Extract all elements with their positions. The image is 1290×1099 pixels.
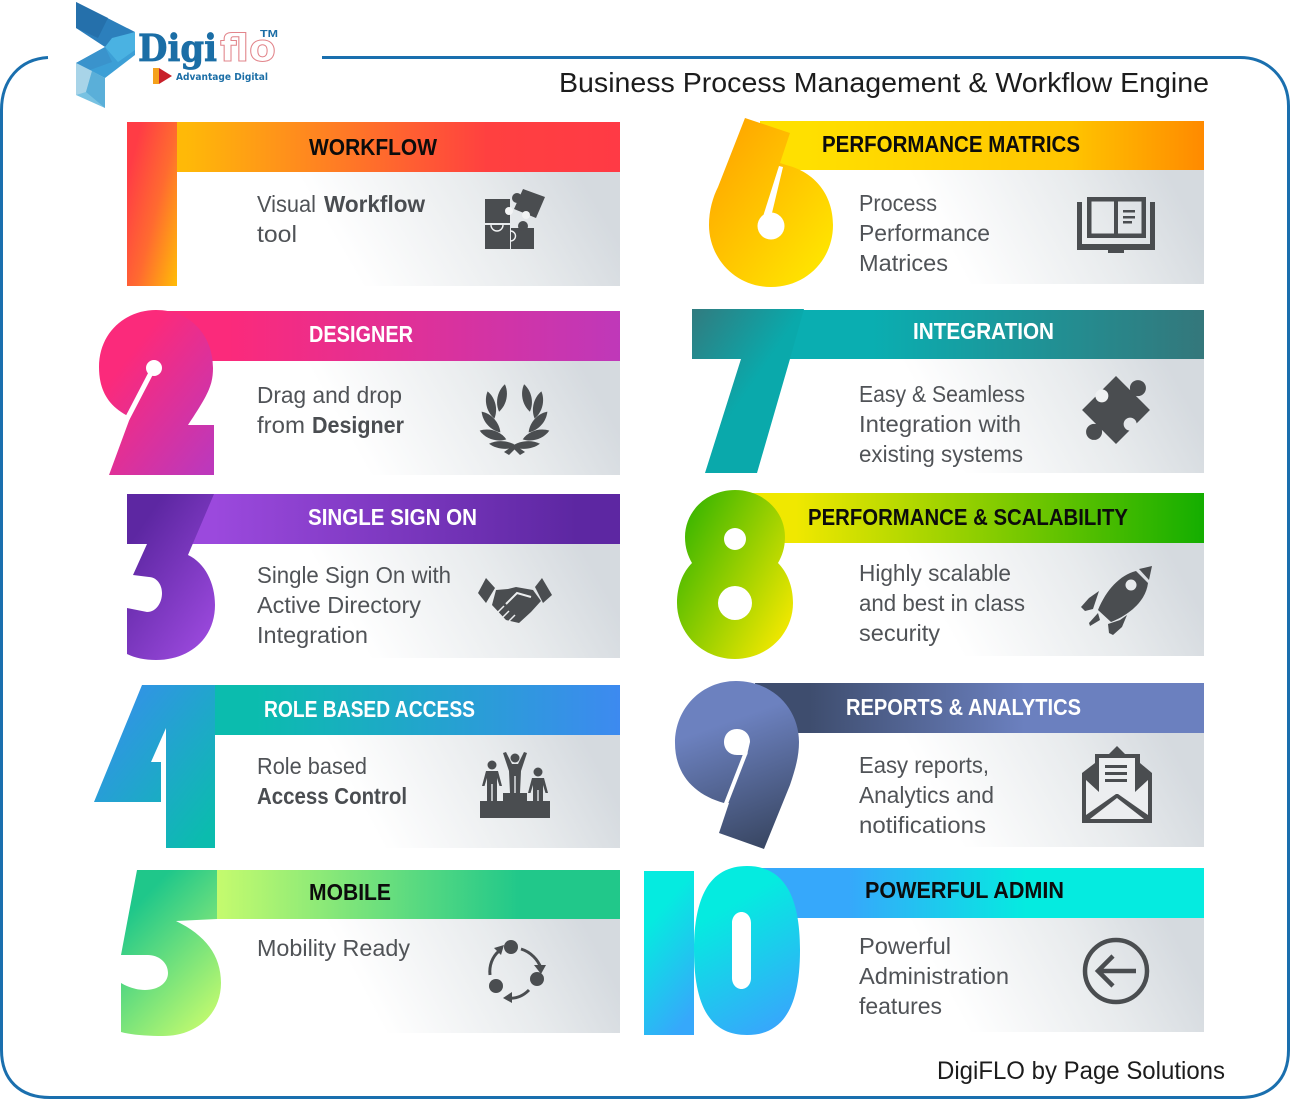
logo tagline: Advantage Digital [176, 72, 268, 83]
logo wordmark: Digi [138, 26, 217, 70]
numeral 2 [99, 310, 214, 475]
description: from [257, 412, 305, 438]
logo play icon [153, 68, 172, 84]
description [257, 562, 451, 648]
panel: 8 performance and scalability [677, 490, 1204, 659]
description: Mobility Ready [257, 935, 410, 961]
numeral 4 [94, 685, 215, 848]
panel: 9 reports and analytics [675, 681, 1204, 849]
numeral 7 [692, 309, 804, 473]
header band [217, 870, 620, 919]
description: security [859, 620, 941, 646]
numeral 6 [709, 118, 833, 287]
icon: open envelope [1082, 746, 1152, 823]
description: Analytics and [859, 782, 994, 808]
description [859, 190, 990, 276]
icon: laurel wreath [478, 383, 551, 455]
description [257, 753, 407, 809]
description: Role based [257, 753, 367, 779]
panel: 3 single sign on [127, 494, 620, 660]
numeral 10 [644, 866, 800, 1035]
description: Active Directory [257, 592, 421, 618]
description: Easy reports, [859, 752, 989, 778]
heading: POWERFUL ADMIN [865, 877, 1064, 903]
header band [790, 310, 1204, 359]
heading: PERFORMANCE & SCALABILITY [808, 504, 1128, 530]
description: Workflow [324, 191, 425, 217]
panel body [177, 172, 620, 286]
description: notifications [859, 812, 986, 838]
panel body [190, 361, 620, 475]
header band [160, 311, 620, 361]
panel body [790, 543, 1204, 656]
heading: MOBILE [309, 879, 391, 905]
description: Access Control [257, 783, 407, 809]
header band [215, 685, 620, 735]
header band [760, 121, 1204, 170]
description: Easy & Seamless [859, 381, 1025, 407]
icon: podium with people [480, 752, 550, 818]
description: Visual [257, 191, 316, 217]
description: Integration with [859, 411, 1021, 437]
icon: cycle [489, 940, 546, 1003]
description: Administration [859, 963, 1009, 989]
description: and best in class [859, 590, 1025, 616]
description [257, 191, 425, 247]
panel: 1 workflow [127, 122, 620, 286]
panel body [190, 544, 620, 658]
description [859, 752, 994, 838]
panel: 10 powerful admin [644, 866, 1204, 1035]
description: Drag and drop [257, 382, 402, 408]
description: Matrices [859, 250, 948, 276]
numeral 3 [127, 494, 215, 660]
description: Designer [312, 412, 404, 438]
heading: PERFORMANCE MATRICS [822, 131, 1080, 157]
icon: puzzle pieces [485, 189, 545, 249]
description [859, 381, 1025, 467]
title: Business Process Management & Workflow Engine [559, 67, 1209, 98]
header band [750, 493, 1204, 543]
icon: open book [1077, 197, 1155, 253]
icon: rocket [1081, 566, 1152, 635]
panel body [215, 735, 620, 848]
description [257, 382, 404, 438]
panel: 4 role based access [94, 685, 620, 848]
description: Integration [257, 622, 368, 648]
description: Process [859, 190, 937, 216]
description [859, 933, 1009, 1019]
description: Highly scalable [859, 560, 1011, 586]
heading: WORKFLOW [309, 134, 437, 160]
description [859, 560, 1025, 646]
panel body [217, 919, 620, 1033]
icon: handshake [478, 578, 552, 623]
numeral 8 [677, 490, 793, 659]
header band [755, 683, 1204, 733]
panel body [790, 733, 1204, 847]
numeral 1 [127, 122, 177, 286]
header band [180, 494, 620, 544]
footer credit: DigiFLO by Page Solutions [937, 1057, 1225, 1085]
panel body [800, 170, 1204, 284]
description: Performance [859, 220, 990, 246]
trademark: TM [260, 29, 278, 40]
heading: REPORTS & ANALYTICS [846, 694, 1081, 720]
heading: SINGLE SIGN ON [308, 504, 477, 530]
heading: DESIGNER [309, 321, 413, 347]
description: features [859, 993, 942, 1019]
numeral 9 [675, 681, 799, 849]
logo: Digiflo [76, 2, 278, 108]
description: existing systems [859, 441, 1023, 467]
logo wordmark outline: flo [220, 27, 276, 70]
header band [177, 122, 620, 172]
panel: 2 designer [99, 310, 620, 475]
icon: puzzle piece [1070, 364, 1162, 456]
description: tool [257, 221, 297, 247]
panel body [800, 918, 1204, 1032]
panel: 6 performance matrics [709, 118, 1204, 287]
heading: ROLE BASED ACCESS [264, 696, 475, 722]
icon: back arrow in circle [1085, 940, 1147, 1002]
header band [760, 868, 1204, 918]
panel: 5 mobile [121, 870, 620, 1036]
heading: INTEGRATION [913, 318, 1054, 344]
logo mark: faceted arrow [76, 2, 135, 108]
description: Powerful [859, 933, 951, 959]
description: Single Sign On with [257, 562, 451, 588]
panel: 7 integration [692, 309, 1204, 473]
panel body [790, 359, 1204, 473]
numeral 5 [121, 870, 221, 1036]
